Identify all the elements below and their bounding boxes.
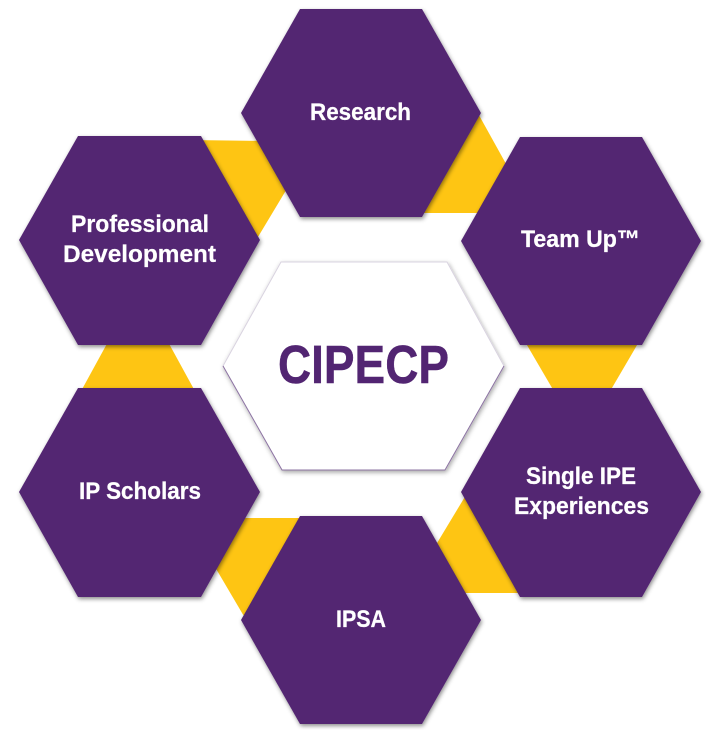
hexagon: IPSA: IPSA <box>336 606 386 633</box>
hexagon: research: Research <box>310 99 411 126</box>
connector: IP scholars to professional development <box>80 340 196 393</box>
connector: team up to single IPE <box>524 340 640 393</box>
connector: IP scholars to IPSA <box>205 518 320 635</box>
connector: professional development to research <box>190 140 297 257</box>
hexagon: professional development: Development <box>63 241 216 268</box>
hexagon: professional development <box>19 136 260 345</box>
hexagon: single IPE experiences: Single IPE <box>526 463 636 490</box>
hexagon: IPSA <box>241 516 481 724</box>
center hexagon: CIPECP: CIPECP <box>278 335 449 395</box>
hexagon: research <box>241 9 481 217</box>
hexagon: IP scholars <box>19 388 260 597</box>
hexagon: IP scholars: IP Scholars <box>79 478 201 505</box>
hexagon: single IPE experiences: Experiences <box>514 493 649 520</box>
connector: research to team up <box>410 99 515 213</box>
center hexagon: CIPECP <box>223 262 504 470</box>
hexagon: single IPE experiences <box>461 388 701 597</box>
hexagon: professional development: Professional <box>71 211 209 238</box>
hexagon: team up: Team Up™ <box>521 226 640 253</box>
connector: IPSA to single IPE <box>425 495 535 593</box>
hexagon: team up <box>461 137 701 345</box>
